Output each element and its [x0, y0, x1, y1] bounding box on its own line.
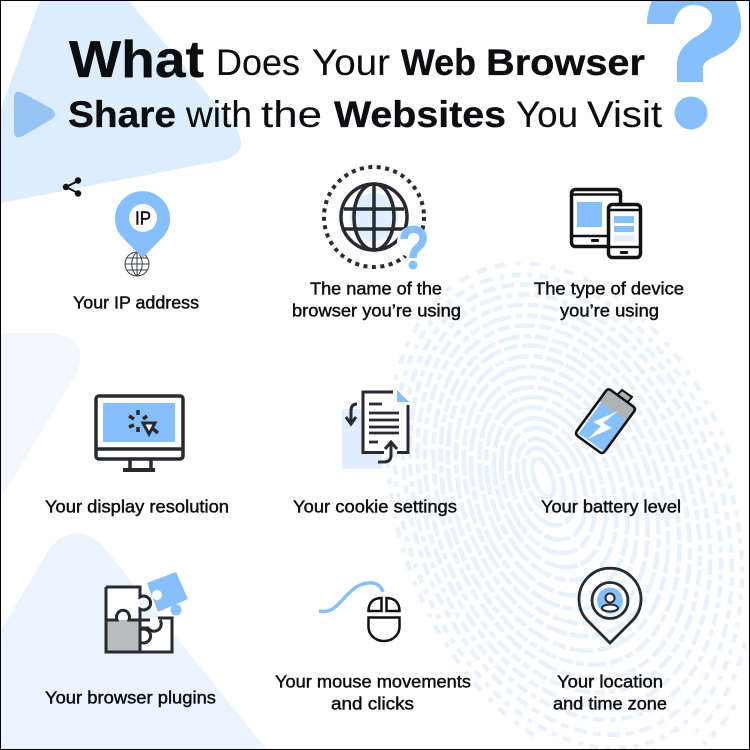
icon: puzzle pieces: [106, 572, 188, 652]
title: Websites: [334, 93, 506, 135]
icon: tablet and phone: [571, 190, 640, 258]
label: mouse movements: Your mouse movements: [275, 672, 471, 692]
label: device type: [534, 278, 684, 320]
title: with: [185, 93, 252, 135]
label: browser plugins: Your browser plugins: [45, 688, 216, 708]
background shape: middle-left triangle: [0, 333, 80, 500]
title: Web: [401, 41, 476, 83]
icon: browser globe with question mark: [324, 167, 429, 270]
icon: IP location pin: IP: [135, 208, 151, 228]
title: Your: [312, 41, 390, 83]
label: browser name: The name of the: [310, 278, 442, 298]
icon: cookie document: [342, 390, 409, 469]
label: browser name: [292, 278, 461, 320]
background shape: bottom-left triangle: [0, 533, 267, 750]
label: mouse movements: [275, 672, 471, 714]
title: What: [69, 31, 204, 89]
label: location and time zone: [553, 672, 667, 714]
background: fingerprint: [388, 264, 745, 748]
title: You: [516, 93, 578, 135]
icon: monitor with cursor: [96, 396, 183, 472]
icon: share: [64, 178, 80, 196]
label: IP address: Your IP address: [73, 292, 199, 312]
background shape: top-left triangle: [0, 0, 241, 203]
label: battery level: Your battery level: [541, 496, 681, 516]
label: cookie settings: Your cookie settings: [293, 496, 457, 516]
title: Does: [216, 41, 300, 83]
icon: location pin with person: [579, 568, 641, 643]
title: Visit: [587, 93, 663, 135]
icon: IP location pin: [115, 191, 170, 276]
label: device type: The type of device: [534, 278, 684, 298]
label: browser name: browser you’re using: [292, 300, 461, 320]
title: the: [261, 93, 322, 135]
label: location and time zone: Your location: [557, 672, 663, 692]
label: device type: you’re using: [560, 300, 659, 320]
label: display resolution: Your display resolution: [45, 496, 229, 516]
icon: large question mark: [647, 0, 741, 130]
label: location and time zone: and time zone: [553, 694, 667, 714]
icon: play triangle: [14, 92, 55, 137]
title: Share: [68, 93, 176, 135]
label: mouse movements: and clicks: [331, 694, 414, 714]
icon: battery: [576, 389, 637, 453]
title: Browser: [486, 41, 645, 83]
icon: mouse with cable: [319, 583, 400, 641]
title: [68, 31, 663, 135]
